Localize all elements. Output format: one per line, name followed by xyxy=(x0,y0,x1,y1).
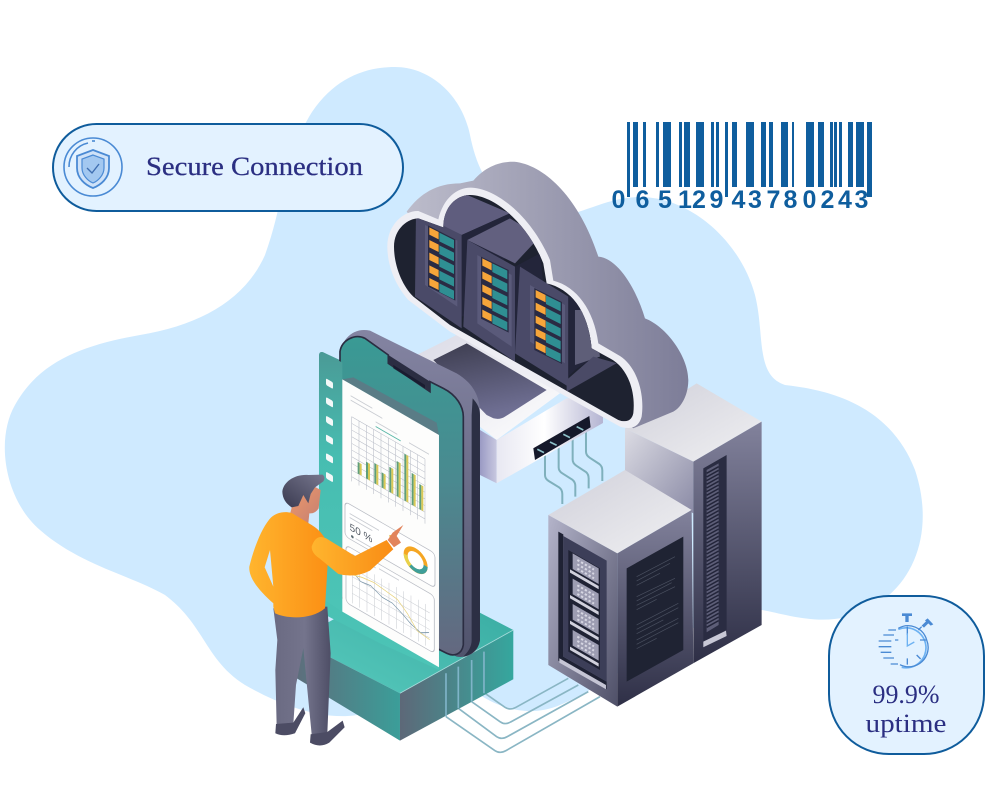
trousers xyxy=(273,607,331,734)
rack 1 xyxy=(415,193,510,328)
hair xyxy=(282,475,325,507)
notch xyxy=(388,355,430,392)
rack 3 xyxy=(515,267,617,392)
uptime label: uptime xyxy=(866,709,946,738)
report document xyxy=(342,379,439,667)
barcode bars xyxy=(627,122,872,197)
rack 2 xyxy=(463,218,543,362)
bottom connection wires xyxy=(446,678,600,752)
data panel xyxy=(627,537,683,682)
shirt xyxy=(249,512,328,617)
cloud rim xyxy=(387,188,642,428)
donut chart xyxy=(406,544,426,576)
line chart card xyxy=(346,545,434,653)
stats card xyxy=(345,502,435,588)
server status lights xyxy=(428,225,562,364)
barcode xyxy=(612,122,872,214)
wire traces xyxy=(446,652,484,717)
barcode digits: 06512943780243 xyxy=(612,186,868,214)
network router box xyxy=(400,332,603,483)
bar chart xyxy=(352,417,425,524)
phone platform base xyxy=(297,577,513,741)
shoes xyxy=(275,707,345,745)
cloud interior xyxy=(394,195,634,422)
neck and face xyxy=(289,485,321,523)
side menu squares xyxy=(326,378,333,482)
cloud with servers xyxy=(380,162,688,433)
icon: shield xyxy=(64,138,122,196)
icon: stopwatch xyxy=(879,613,933,668)
tall back tower xyxy=(625,383,762,663)
router wires xyxy=(545,429,602,504)
hand xyxy=(388,525,403,547)
side panel xyxy=(319,352,439,670)
phone screen xyxy=(340,337,463,655)
person touching the screen xyxy=(249,475,403,745)
cloud back xyxy=(407,162,688,428)
header shade xyxy=(342,377,439,435)
badge label: Secure Connection xyxy=(146,152,363,181)
port xyxy=(533,416,591,460)
phone body xyxy=(340,330,480,657)
background blob xyxy=(5,67,923,716)
server tower xyxy=(548,383,762,707)
front server xyxy=(548,470,693,707)
pointing arm xyxy=(312,537,393,576)
arm gap xyxy=(265,550,273,587)
smartphone xyxy=(319,330,480,670)
recess xyxy=(433,343,547,419)
uptime value: 99.9% xyxy=(872,680,940,709)
uptime badge xyxy=(829,596,984,754)
stats card: 50 % xyxy=(350,522,373,546)
drive bays xyxy=(568,550,600,670)
secure connection badge xyxy=(53,124,403,211)
